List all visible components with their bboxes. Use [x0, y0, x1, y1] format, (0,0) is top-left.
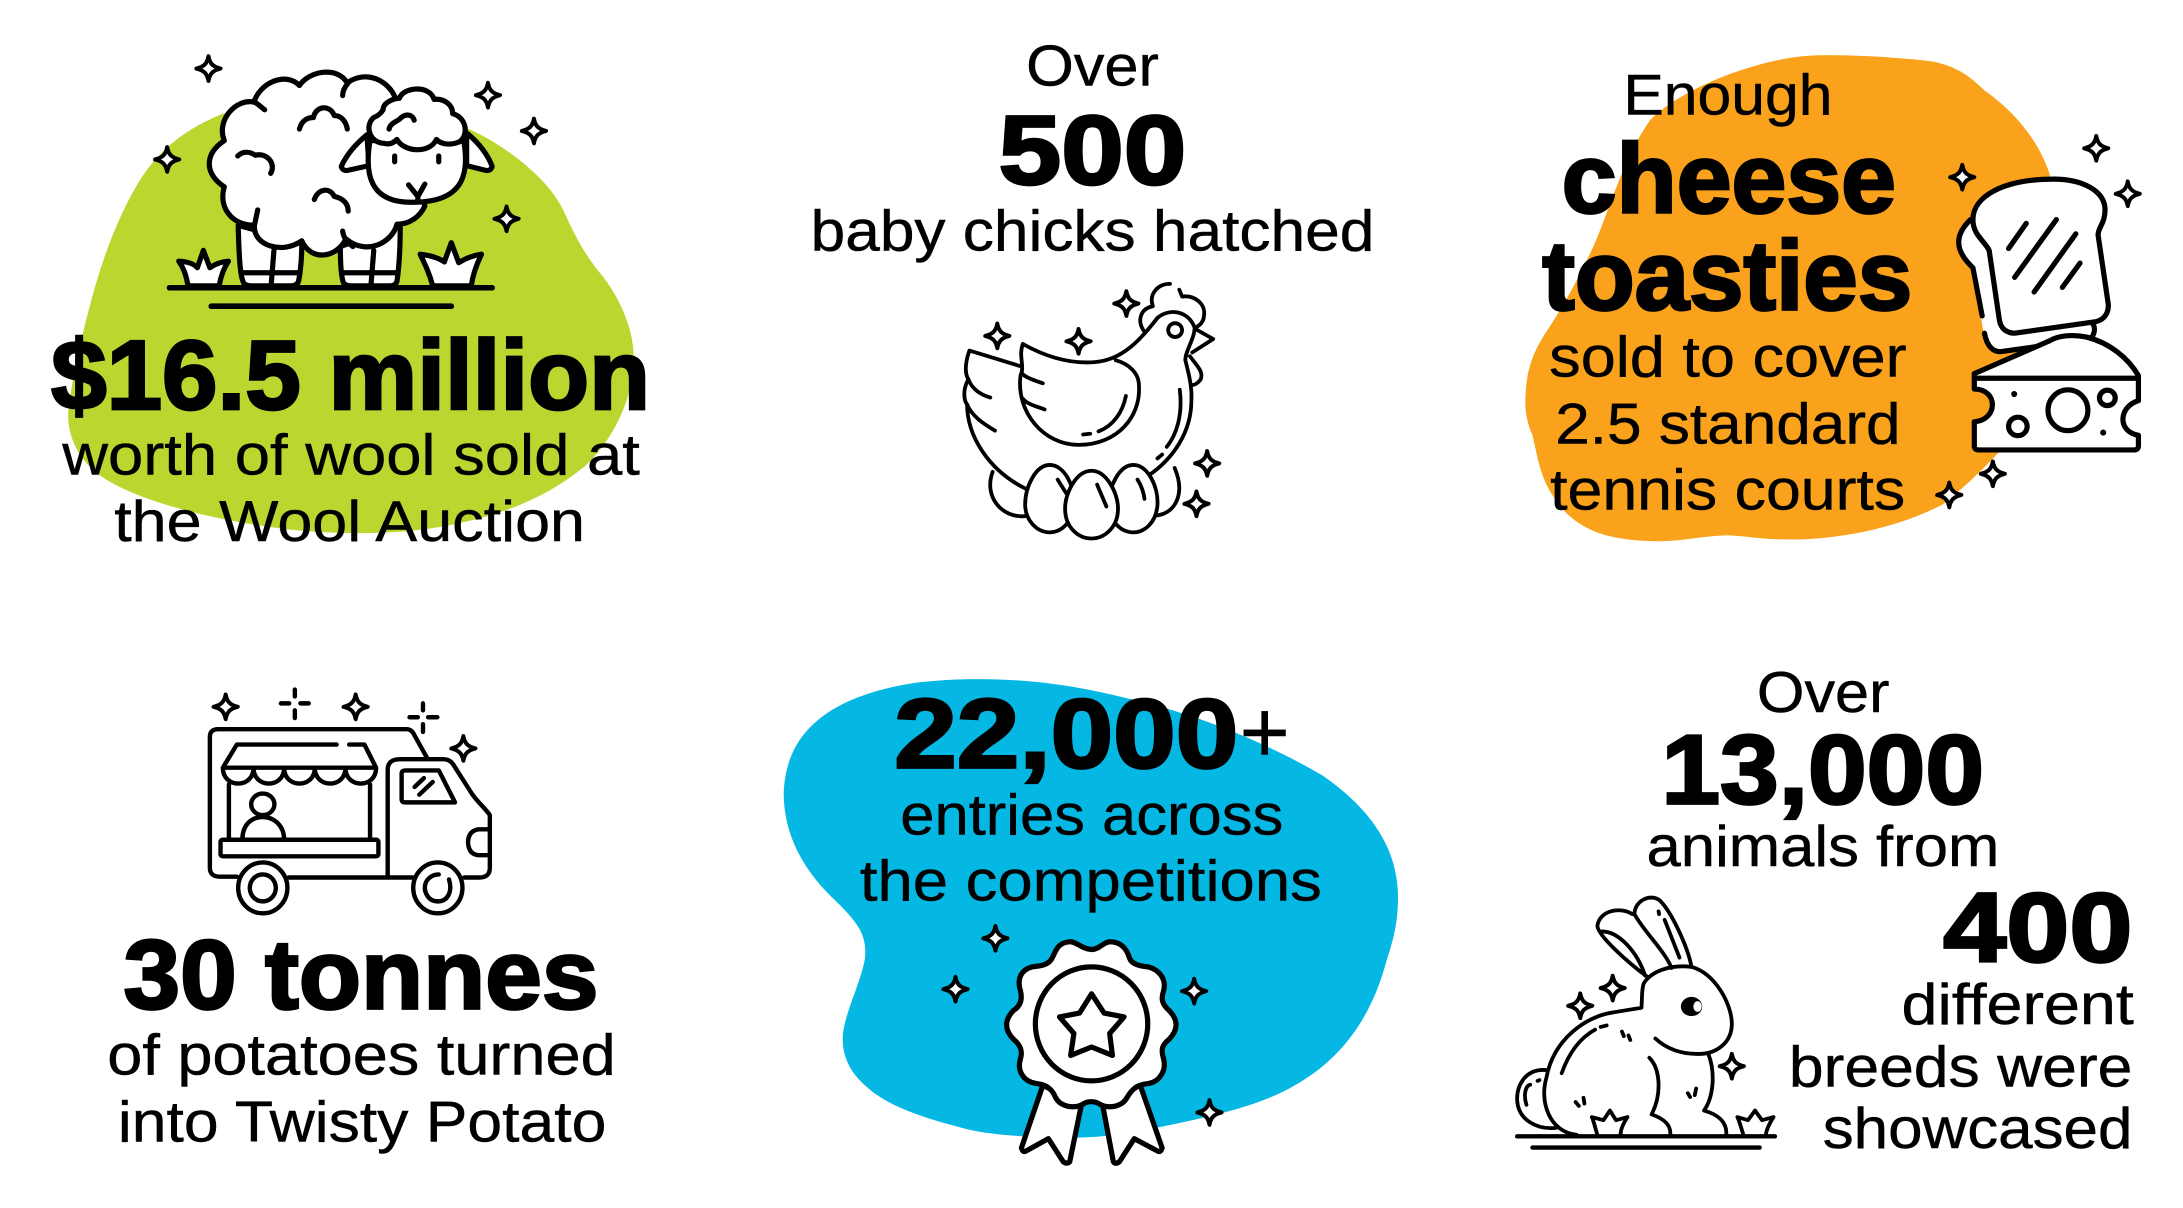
caption: wool line 1: worth of wool sold at: [61, 422, 640, 487]
panel: wool auction: [51, 56, 650, 554]
stat: 500: 500: [999, 97, 1186, 206]
stat: $16.5 million: $16.5 million: [51, 321, 650, 431]
caption: the competitions: the competitions: [860, 848, 1322, 913]
panel: animals and breeds: [1517, 659, 2134, 1161]
caption: potatoes line 1: of potatoes turned: [107, 1022, 616, 1087]
stat: 30 tonnes: 30 tonnes: [124, 921, 598, 1030]
sparkles: [1568, 976, 1744, 1079]
icon: rabbit: [1517, 898, 1775, 1148]
green blob: [68, 104, 634, 533]
caption: 2.5 standard: 2.5 standard: [1555, 391, 1901, 456]
icon: sheep: [169, 72, 492, 306]
panel: baby chicks: [811, 33, 1374, 539]
icon: rosette: [1007, 942, 1176, 1163]
caption: tennis courts: tennis courts: [1550, 457, 1905, 522]
stat: 13,000: 13,000: [1661, 716, 1984, 825]
plus sign: +: [1240, 682, 1290, 782]
caption: animals from: animals from: [1647, 814, 1999, 879]
icon: food truck: [210, 690, 490, 913]
sparkles: [155, 56, 546, 231]
sparkles: [214, 695, 475, 761]
caption: breeds were: breeds were: [1789, 1034, 2132, 1099]
caption: potatoes line 2: into Twisty Potato: [118, 1089, 606, 1154]
text: Enough: Enough: [1623, 62, 1832, 127]
orange blob: [1525, 55, 2053, 541]
caption: baby chicks hatched: baby chicks hatched: [811, 198, 1374, 263]
stat: 22,000: 22,000: [894, 680, 1238, 789]
stat: toasties: toasties: [1542, 222, 1912, 331]
sparkles: [1937, 136, 2140, 507]
panel: competition entries: [784, 679, 1398, 1163]
caption: entries across: entries across: [900, 782, 1283, 847]
icon: toast and cheese: [1959, 179, 2138, 450]
panel: twisty potato: [107, 690, 616, 1154]
panel: cheese toasties: [1525, 55, 2140, 541]
sparkles: [985, 291, 1219, 516]
blue blob: [784, 679, 1398, 1138]
icon: hen on eggs: [964, 284, 1213, 539]
stat: cheese: cheese: [1562, 125, 1896, 234]
text: Over: Over: [1026, 33, 1159, 98]
caption: showcased: showcased: [1823, 1095, 2132, 1161]
stat: 400: 400: [1943, 874, 2132, 983]
caption: sold to cover: sold to cover: [1549, 324, 1907, 389]
sparkles: [943, 926, 1222, 1125]
text: Over: Over: [1757, 659, 1889, 725]
caption: different: different: [1902, 971, 2134, 1037]
caption: wool line 2: the Wool Auction: [114, 489, 585, 554]
